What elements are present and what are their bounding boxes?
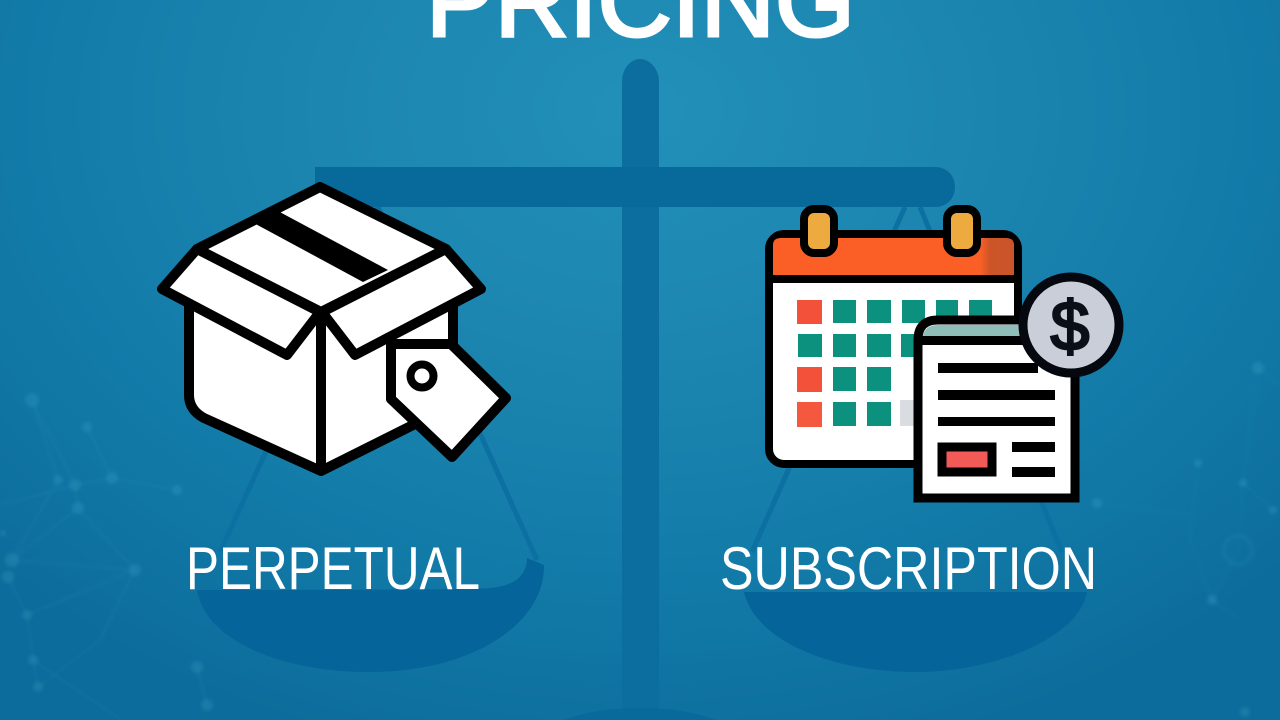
packing tape — [252, 210, 388, 282]
left pan strings — [220, 207, 537, 560]
icon: open box with price tag — [162, 187, 506, 471]
network pattern: lower right — [1092, 362, 1279, 717]
calendar ring right — [947, 209, 977, 253]
dollar coin — [1023, 277, 1119, 373]
invoice header band — [923, 325, 1030, 336]
tag hole — [410, 364, 434, 388]
invoice red box — [942, 447, 992, 472]
label: subscription: SUBSCRIPTION — [720, 535, 1097, 602]
dollar sign: $ — [1051, 287, 1089, 365]
right flap — [322, 249, 481, 355]
invoice sheet — [918, 320, 1075, 498]
scale beam — [315, 167, 955, 207]
invoice header rule — [914, 336, 1034, 345]
scale silhouette — [197, 59, 1087, 720]
scale base — [565, 708, 715, 720]
network pattern: lower left — [0, 393, 213, 719]
icon: calendar with invoice and dollar coin — [769, 209, 1119, 498]
calendar header — [773, 238, 1014, 275]
calendar header rule — [769, 275, 1018, 283]
box lid top — [197, 187, 446, 312]
left pan — [197, 558, 544, 672]
calendar page — [769, 234, 1018, 464]
calendar day grid — [797, 300, 992, 427]
right pan strings — [752, 207, 1062, 552]
label: perpetual: PERPETUAL — [186, 535, 480, 602]
box centre edge — [316, 314, 326, 471]
right pan — [744, 592, 1087, 672]
invoice text lines — [938, 363, 1055, 477]
left flap — [162, 249, 320, 355]
price tag — [391, 344, 506, 457]
box body — [189, 300, 453, 471]
calendar ring left — [804, 209, 834, 253]
scale post — [622, 59, 659, 720]
